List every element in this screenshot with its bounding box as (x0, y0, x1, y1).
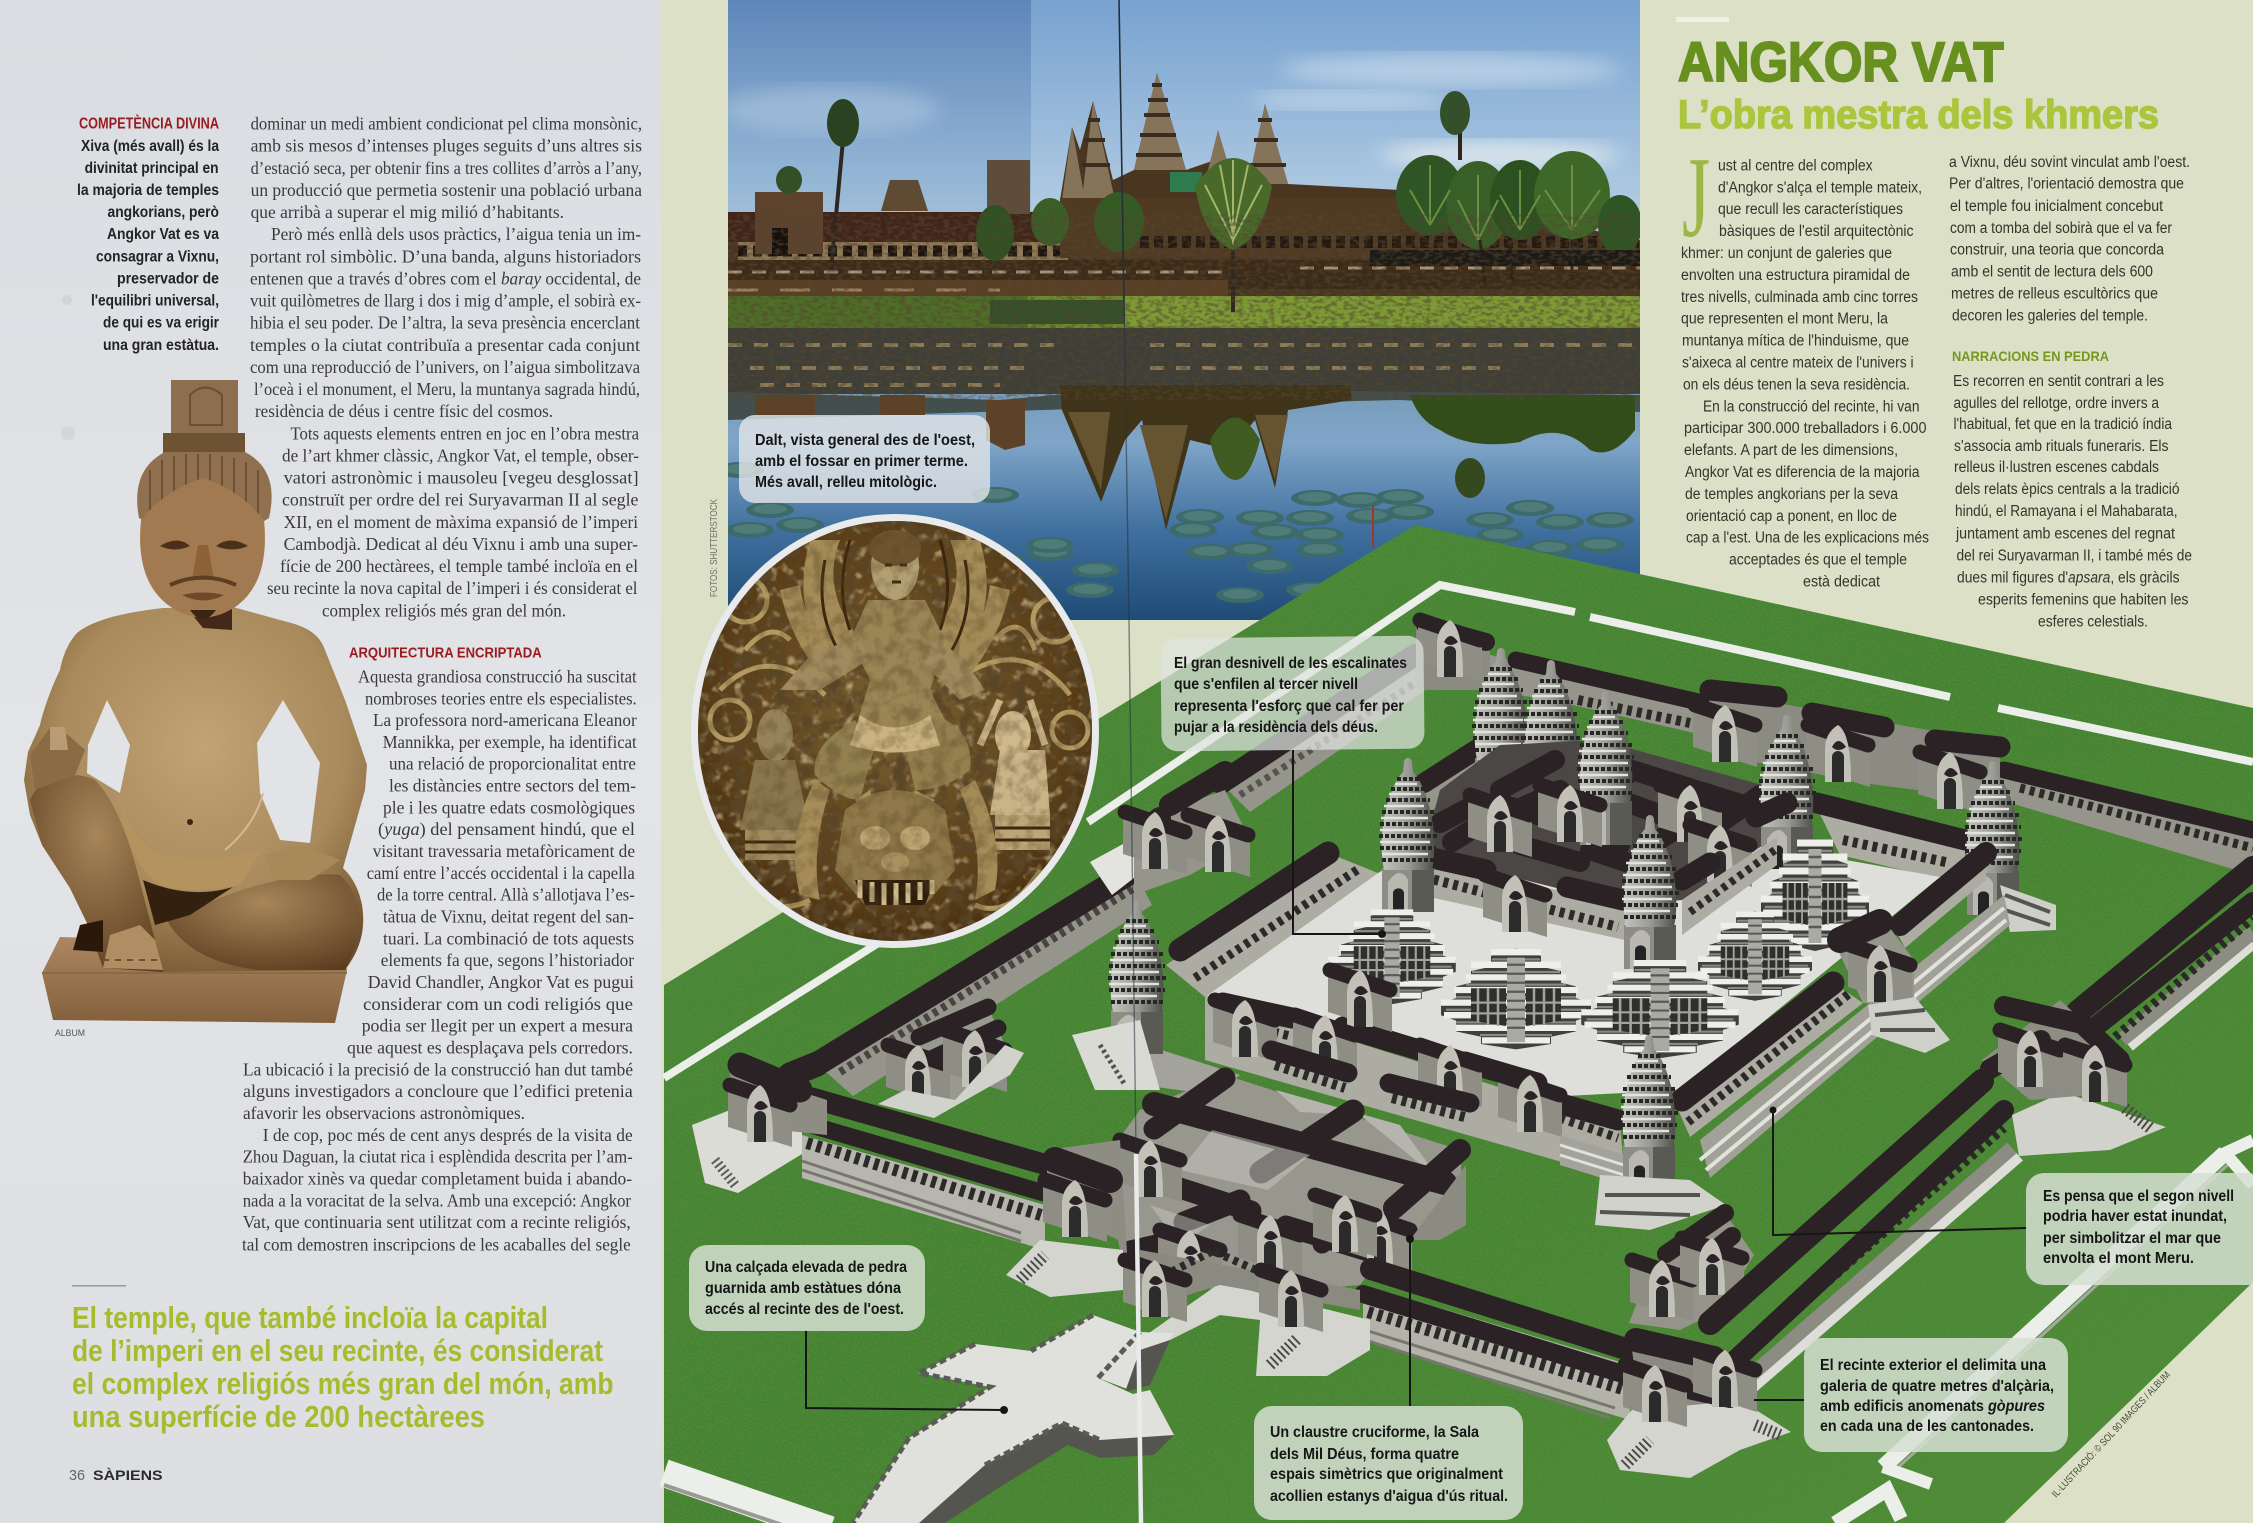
text block: main article lower column: considerar com un codi religiós que (363, 994, 633, 1014)
outer enclosure: south-east galleries (1710, 868, 2253, 1392)
relief: seated side deities (740, 700, 1050, 860)
text block: right page first column: Angkor Vat es diferencia de la majoria (1685, 464, 1920, 481)
text block: main article lower column: (yuga) del pensament hindú, que el (378, 819, 635, 840)
text block: main article lower column: Zhou Daguan, la ciutat rica i esplèndida descrita per l’am- (243, 1147, 633, 1167)
text block: main article upper column: hibia el seu poder. De l’altra, la seva presència encerclant (250, 313, 640, 333)
south-east gate (1982, 1000, 2166, 1156)
text block: main article upper column: temples o la ciutat contribuïa a presentar cada conjunt (250, 335, 640, 355)
text block: Narracions en pedra: esferes celestials. (2038, 614, 2148, 631)
text block: right page first column: que representen el mont Meru, la (1681, 311, 1888, 328)
relief: kala mask (795, 780, 998, 905)
callout: outer enclosure: galeria de quatre metres d'alçària, (1820, 1378, 2054, 1395)
text block: right page first column: de temples angkorians per la seva (1685, 486, 1898, 503)
central west entrance (1006, 1140, 1130, 1300)
statue: torso and arms (24, 607, 367, 972)
text block: main article lower column: I de cop, poc més de cent anys després de la visita de (263, 1125, 633, 1145)
text block: right page second column: a Vixnu, déu sovint vinculat amb l'oest. (1949, 154, 2190, 171)
page footer: SÀPIENS (93, 1467, 163, 1483)
south-east inner gallery and terrace (1677, 853, 2010, 1178)
pull quote: El temple, que també incloïa la capital (72, 1300, 548, 1335)
text block: Narracions en pedra: esperits femenins que habiten les (1978, 592, 2189, 609)
palm trees and foliage (776, 91, 1642, 312)
text block: right page second column: el temple fou inicialment concebut (1950, 198, 2164, 215)
statue of Vishnu (24, 295, 367, 1023)
reflection in the moat (755, 385, 1635, 530)
callout: cruciform cloister: dels Mil Déus, forma quatre (1270, 1446, 1459, 1463)
text block: main article lower column: alguns investigadors a concloure que l’edifici pretenia (243, 1081, 633, 1101)
text block: main article lower column: una relació de proporcionalitat entre (389, 754, 636, 774)
text block: main article upper column: d’estació seca, per obtenir fins a tres collites d’arròs a l’any, (251, 158, 642, 178)
text block: Narracions en pedra: l'habitual, fet que en la tradició índia (1954, 416, 2172, 433)
sidebar: Competència divina: la majoria de temples (77, 182, 219, 199)
text block: main article lower column: nada a la voracitat de la selva. Amb una excepció: Angkor (243, 1190, 631, 1210)
text block: right page first column: elefants. A part de les dimensions, (1684, 442, 1898, 459)
text block: main article lower column: Aquesta grandiosa construcció ha suscitat (358, 666, 637, 686)
text block: right page first column: acceptades és que el temple (1729, 552, 1907, 569)
sidebar: Competència divina: consagrar a Vixnu, (96, 248, 219, 266)
text block: main article lower column: elements fa que, segons l’historiador (381, 950, 634, 970)
text block: right page first column: participar 300.000 treballadors i 6.000 (1684, 420, 1927, 437)
page footer: 36 (69, 1467, 85, 1484)
stepped terraces of the pyramid (1328, 839, 1869, 1058)
drop cap: J (1682, 134, 1710, 262)
text block: main article lower column: visitant travessaria metafòricament de (373, 841, 635, 861)
central sanctuary block (1379, 691, 1816, 969)
text block: main article upper column: l’oceà i el monument, el Meru, la muntanya sagrada hindú, (254, 379, 640, 399)
statue: head and headdress (176, 595, 232, 630)
outer enclosure: north-east gallery (1490, 655, 2253, 875)
callout: causeway (689, 1245, 1008, 1414)
text block: main article upper column: dominar un medi ambient condicionat pel clima monsònic, (251, 114, 642, 134)
text block: main article upper column: que arribà a superar el mig milió d’habitants. (251, 202, 564, 222)
text block: right page first column: d'Angkor s'alça el temple mateix, (1718, 179, 1922, 196)
page footer (69, 1467, 163, 1484)
text block: main article upper column: Tots aquests elements entren en joc en l’obra mestra (290, 423, 639, 443)
causeway (853, 1315, 1174, 1523)
text block: main article lower column: tuari. La combinació de tots aquests (383, 928, 634, 948)
pull quote (72, 1285, 614, 1434)
text block: main article lower column: David Chandler, Angkor Vat es pugui (368, 972, 634, 992)
text block: main article upper column: portant rol simbòlic. D’una banda, alguns historiadors (250, 246, 641, 266)
left corner gate (692, 1060, 827, 1193)
text block: main article upper column (250, 114, 642, 620)
cruciform cloister (1118, 1075, 1466, 1305)
text block: right page first column: envolten una estructura piramidal de (1681, 267, 1910, 284)
text block: right page second column: amb el sentit de lectura dels 600 (1951, 264, 2153, 280)
callout: outer enclosure: amb edificis anomenats gòpures (1820, 1398, 2045, 1415)
text block: main article upper column: vuit quilòmetres de llarg i dos i mig d’ample, el sobirà ex- (250, 290, 641, 310)
text block: main article upper column: residència de déus i centre físic del cosmos. (255, 401, 553, 421)
sidebar: Competència divina: COMPETÈNCIA DIVINA (79, 116, 219, 132)
inner courtyard floor (1205, 800, 1940, 1097)
text block: Narracions en pedra: del rei Suryavarman II, i també més de (1956, 548, 2192, 565)
text block: right page second column (1949, 154, 2190, 325)
statue: arm gaps (87, 700, 320, 843)
sidebar: Competència divina: de qui es va erigir (103, 314, 219, 332)
photo: Angkor Vat west view with moat (716, 0, 1642, 620)
callout: flooded second level (1770, 1106, 2253, 1285)
relief: scrollwork (710, 578, 1088, 908)
credit: illustration: IL·LUSTRACIÓ: © SOL 90 IMAGES / ALBUM (2049, 1368, 2173, 1500)
credit: album: ALBUM (55, 1028, 85, 1038)
panel: right page pale green background (661, 0, 2253, 1523)
text block: Narracions en pedra: relleus il·lustren escenes cabdals (1954, 459, 2159, 476)
text block: main article lower column: nombroses teories entre els especialistes. (365, 688, 637, 708)
sidebar: Competència divina: preservador de (117, 270, 219, 288)
text block: right page second column: metres de relleus escultòrics que (1951, 286, 2158, 302)
callout: causeway: Una calçada elevada de pedra (705, 1259, 907, 1276)
back towers (1472, 648, 1580, 814)
text block: main article lower column: Vat, que continuaria sent utilitzat com a recinte religiós, (243, 1212, 631, 1232)
callout: stairs: representa l'esforç que cal fer per (1174, 698, 1404, 715)
text block: right page second column: Per d'altres, l'orientació demostra que (1949, 176, 2184, 192)
text block: right page first column: s'aixeca al centre mateix de l'univers i (1682, 354, 1914, 372)
callout: cruciform cloister: Un claustre cruciforme, la Sala (1270, 1424, 1479, 1441)
text block: main article upper column: complex religiós més gran del món. (322, 600, 566, 620)
text block: main article lower column: ple i les quatre edats cosmològiques (383, 797, 635, 817)
callout: outer enclosure: El recinte exterior el delimita una (1820, 1357, 2046, 1374)
text block: Narracions en pedra: dels relats èpics centrals a la tradició (1955, 481, 2180, 498)
text block: main article lower column: que aquest es desplaçava pels corredors. (347, 1038, 633, 1058)
text block: main article lower column: de la torre central. Allà s’allotjava l’es- (377, 885, 635, 905)
lily pads (716, 462, 1634, 603)
decorative spine (1119, 0, 1124, 300)
text block: main article lower column: camí entre l’accés occidental i la capella (367, 863, 635, 883)
image: mythological relief medallion (690, 514, 1100, 950)
illustration: grass ground (664, 525, 2253, 1523)
text block: Narracions en pedra: dues mil figures d'apsara, els gràcils (1957, 569, 2180, 586)
text block: main article lower column: La professora nord-americana Eleanor (373, 710, 637, 730)
illustration: white moat border lines (664, 585, 2253, 1523)
pull quote: el complex religiós més gran del món, amb (72, 1366, 614, 1401)
text block: Narracions en pedra: agulles del rellotge, ordre invers a (1954, 395, 2159, 412)
text block: main article upper column: vatori astronòmic i mausoleu [vegeu desglossat] (284, 468, 639, 488)
text block: main article lower column: afavorir les observacions astronòmiques. (243, 1103, 525, 1123)
callout: flooded second level: podria haver estat inundat, (2043, 1208, 2227, 1225)
text block: right page second column: com a tomba del sobirà que el va fer (1950, 220, 2172, 237)
text block: main article upper column: fície de 200 hectàrees, el temple també incloïa en el (280, 556, 638, 576)
inner enclosure: back galleries (1166, 737, 1965, 997)
statue: pedestal (42, 937, 347, 1023)
callout: stairs: El gran desnivell de les escalinates (1174, 655, 1407, 672)
outer enclosure: south-west galleries (802, 1098, 1630, 1420)
text block: right page first column: orientació cap a ponent, en lloc de (1686, 508, 1897, 525)
panel: left page background (0, 0, 661, 1523)
text block: right page first column: tres nivells, culminada amb cinc torres (1681, 289, 1918, 306)
title block: L’obra mestra dels khmers (1678, 93, 2159, 137)
text block: right page first column: ust al centre del complex (1718, 157, 1873, 174)
text block: main article lower column: La ubicació i la precisió de la construcció han dut també (243, 1059, 633, 1079)
pull quote: de l’imperi en el seu recinte, és considerat (72, 1333, 603, 1368)
text block: Narracions en pedra: hindú, el Ramayana i el Mahabarata, (1955, 503, 2178, 520)
heading: Narracions en pedra: NARRACIONS EN PEDRA (1952, 348, 2109, 364)
callout: view caption: amb el fossar en primer terme. (755, 453, 968, 470)
text block: main article upper column: XII, en el moment de màxima expansió de l’imperi (284, 512, 638, 532)
text block: right page first column: que recull les característiques (1718, 201, 1903, 218)
text block: Narracions en pedra: s'associa amb rituals funeraris. Els (1954, 438, 2169, 455)
illustration: 3D model of Angkor Vat temple (692, 620, 2253, 1523)
south gate and steps (1123, 1250, 1370, 1376)
moat lilies band (728, 328, 1640, 394)
callout: causeway: accés al recinte des de l'oest. (705, 1301, 904, 1318)
outer enclosure: north-west gallery (817, 620, 1490, 1096)
callout: stairs: que s'enfilen al tercer nivell (1174, 676, 1358, 693)
text block: main article upper column: de l’art khmer clàssic, Angkor Vat, el temple, obser- (282, 446, 639, 466)
heading: Arquitectura encriptada: ARQUITECTURA ENCRIPTADA (349, 644, 542, 662)
text block: main article upper column: amb sis mesos d’intenses pluges seguits d’uns altres sis (251, 136, 642, 156)
callout: stairs: pujar a la residència dels déus. (1174, 719, 1378, 736)
text block: main article lower column (242, 666, 637, 1254)
sidebar: Competència divina: Xiva (més avall) és la (81, 138, 219, 155)
sidebar: Competència divina: una gran estàtua. (103, 337, 219, 354)
text block: Narracions en pedra: Es recorren en sentit contrari a les (1953, 373, 2164, 390)
temple silhouette (728, 73, 1640, 296)
text block: Narracions en pedra (1953, 373, 2192, 631)
text block: right page first column: cap a l'est. Una de les explicacions més (1686, 530, 1929, 547)
text block: main article lower column: les distàncies entre sectors del tem- (389, 776, 636, 796)
relief: dancing deity (780, 530, 1010, 830)
callout: outer enclosure: en cada una de les cantonades. (1820, 1418, 2034, 1435)
text block: main article upper column: entenen que a través d’obres com el baray occidental, de (250, 268, 641, 288)
text block: main article lower column: baixador xinès va quedar completament buida i abando- (243, 1168, 632, 1188)
text block: main article lower column: Mannikka, per exemple, ha identificat (383, 732, 637, 752)
text block: main article lower column: podia ser llegit per un expert a mesura (362, 1016, 633, 1036)
text block: main article lower column: tal com demostren inscripcions de les acaballes del segle (242, 1234, 631, 1254)
text block: main article upper column: construït per ordre del rei Suryavarman II al segle (282, 490, 639, 510)
text block: right page first column: En la construcció del recinte, hi van (1703, 398, 1920, 415)
callout: view caption (739, 415, 990, 503)
callout: cruciform cloister (1254, 1235, 1523, 1520)
text block: main article upper column: Cambodjà. Dedicat al déu Vixnu i amb una super- (284, 534, 638, 554)
text block: right page first column (1681, 134, 1929, 590)
text block: main article upper column: seu recinte la nova capital de l’imperi i és considerat el (267, 578, 638, 598)
south corner gate and steps (1607, 1335, 1791, 1478)
callout: view caption: Més avall, relleu mitològic. (755, 474, 937, 491)
text block: right page first column: khmer: un conjunt de galeries que (1681, 245, 1892, 262)
pull quote: una superfície de 200 hectàrees (72, 1399, 485, 1434)
sidebar: Competència divina: l'equilibri universal, (91, 292, 219, 310)
callout: cruciform cloister: espais simètrics que originalment (1270, 1466, 1504, 1483)
text block: right page first column: bàsiques de l'estil arquitectònic (1719, 223, 1914, 240)
small library buildings (878, 1007, 1754, 1330)
text block: Narracions en pedra: juntament amb escenes del regnat (1955, 526, 2176, 543)
sidebar: Competència divina: Angkor Vat es va (107, 226, 219, 243)
title block (1676, 17, 2159, 137)
text block: main article lower column: tàtua de Vixnu, deitat regent del san- (383, 906, 634, 926)
callout: view caption: Dalt, vista general des de l'oest, (755, 432, 975, 449)
statue: raised knee and crossed leg (30, 775, 163, 972)
text block: right page first column: està dedicat (1803, 574, 1881, 590)
right corner tower and steps (1964, 761, 2056, 932)
text block: right page second column: decoren les galeries del temple. (1952, 308, 2148, 325)
text block: main article upper column: com una reproducció de l’univers, on l’aigua simbolitzava (250, 357, 640, 377)
title block: ANGKOR VAT (1678, 30, 2004, 93)
sidebar: Competència divina: angkorians, però (108, 204, 219, 221)
text block: right page second column: construir, una teoria que concorda (1950, 242, 2164, 258)
callout: flooded second level: envolta el mont Meru. (2043, 1250, 2194, 1267)
callout: cruciform cloister: acollien estanys d'aigua d'ús ritual. (1270, 1488, 1508, 1505)
sidebar: Competència divina (77, 116, 219, 354)
credit: photos: FOTOS: SHUTTERSTOCK (709, 499, 720, 597)
callout: stairs (1160, 636, 1425, 938)
callout: outer enclosure (1754, 1338, 2068, 1452)
text block: main article upper column: Però més enllà dels usos pràctics, l’aigua tenia un im- (271, 224, 641, 244)
callout: flooded second level: per simbolitzar el mar que (2043, 1230, 2221, 1247)
sidebar: Competència divina: divinitat principal en (85, 160, 219, 177)
text block: right page first column: on els déus tenen la seva residència. (1683, 376, 1910, 393)
callout: causeway: guarnida amb estàtues dóna (705, 1280, 901, 1297)
text block: main article upper column: un producció que permetia sostenir una població urbana (251, 180, 642, 200)
text block: right page first column: muntanya mítica de l'hinduisme, que (1682, 333, 1909, 350)
south-west inner galleries (1072, 900, 1726, 1230)
